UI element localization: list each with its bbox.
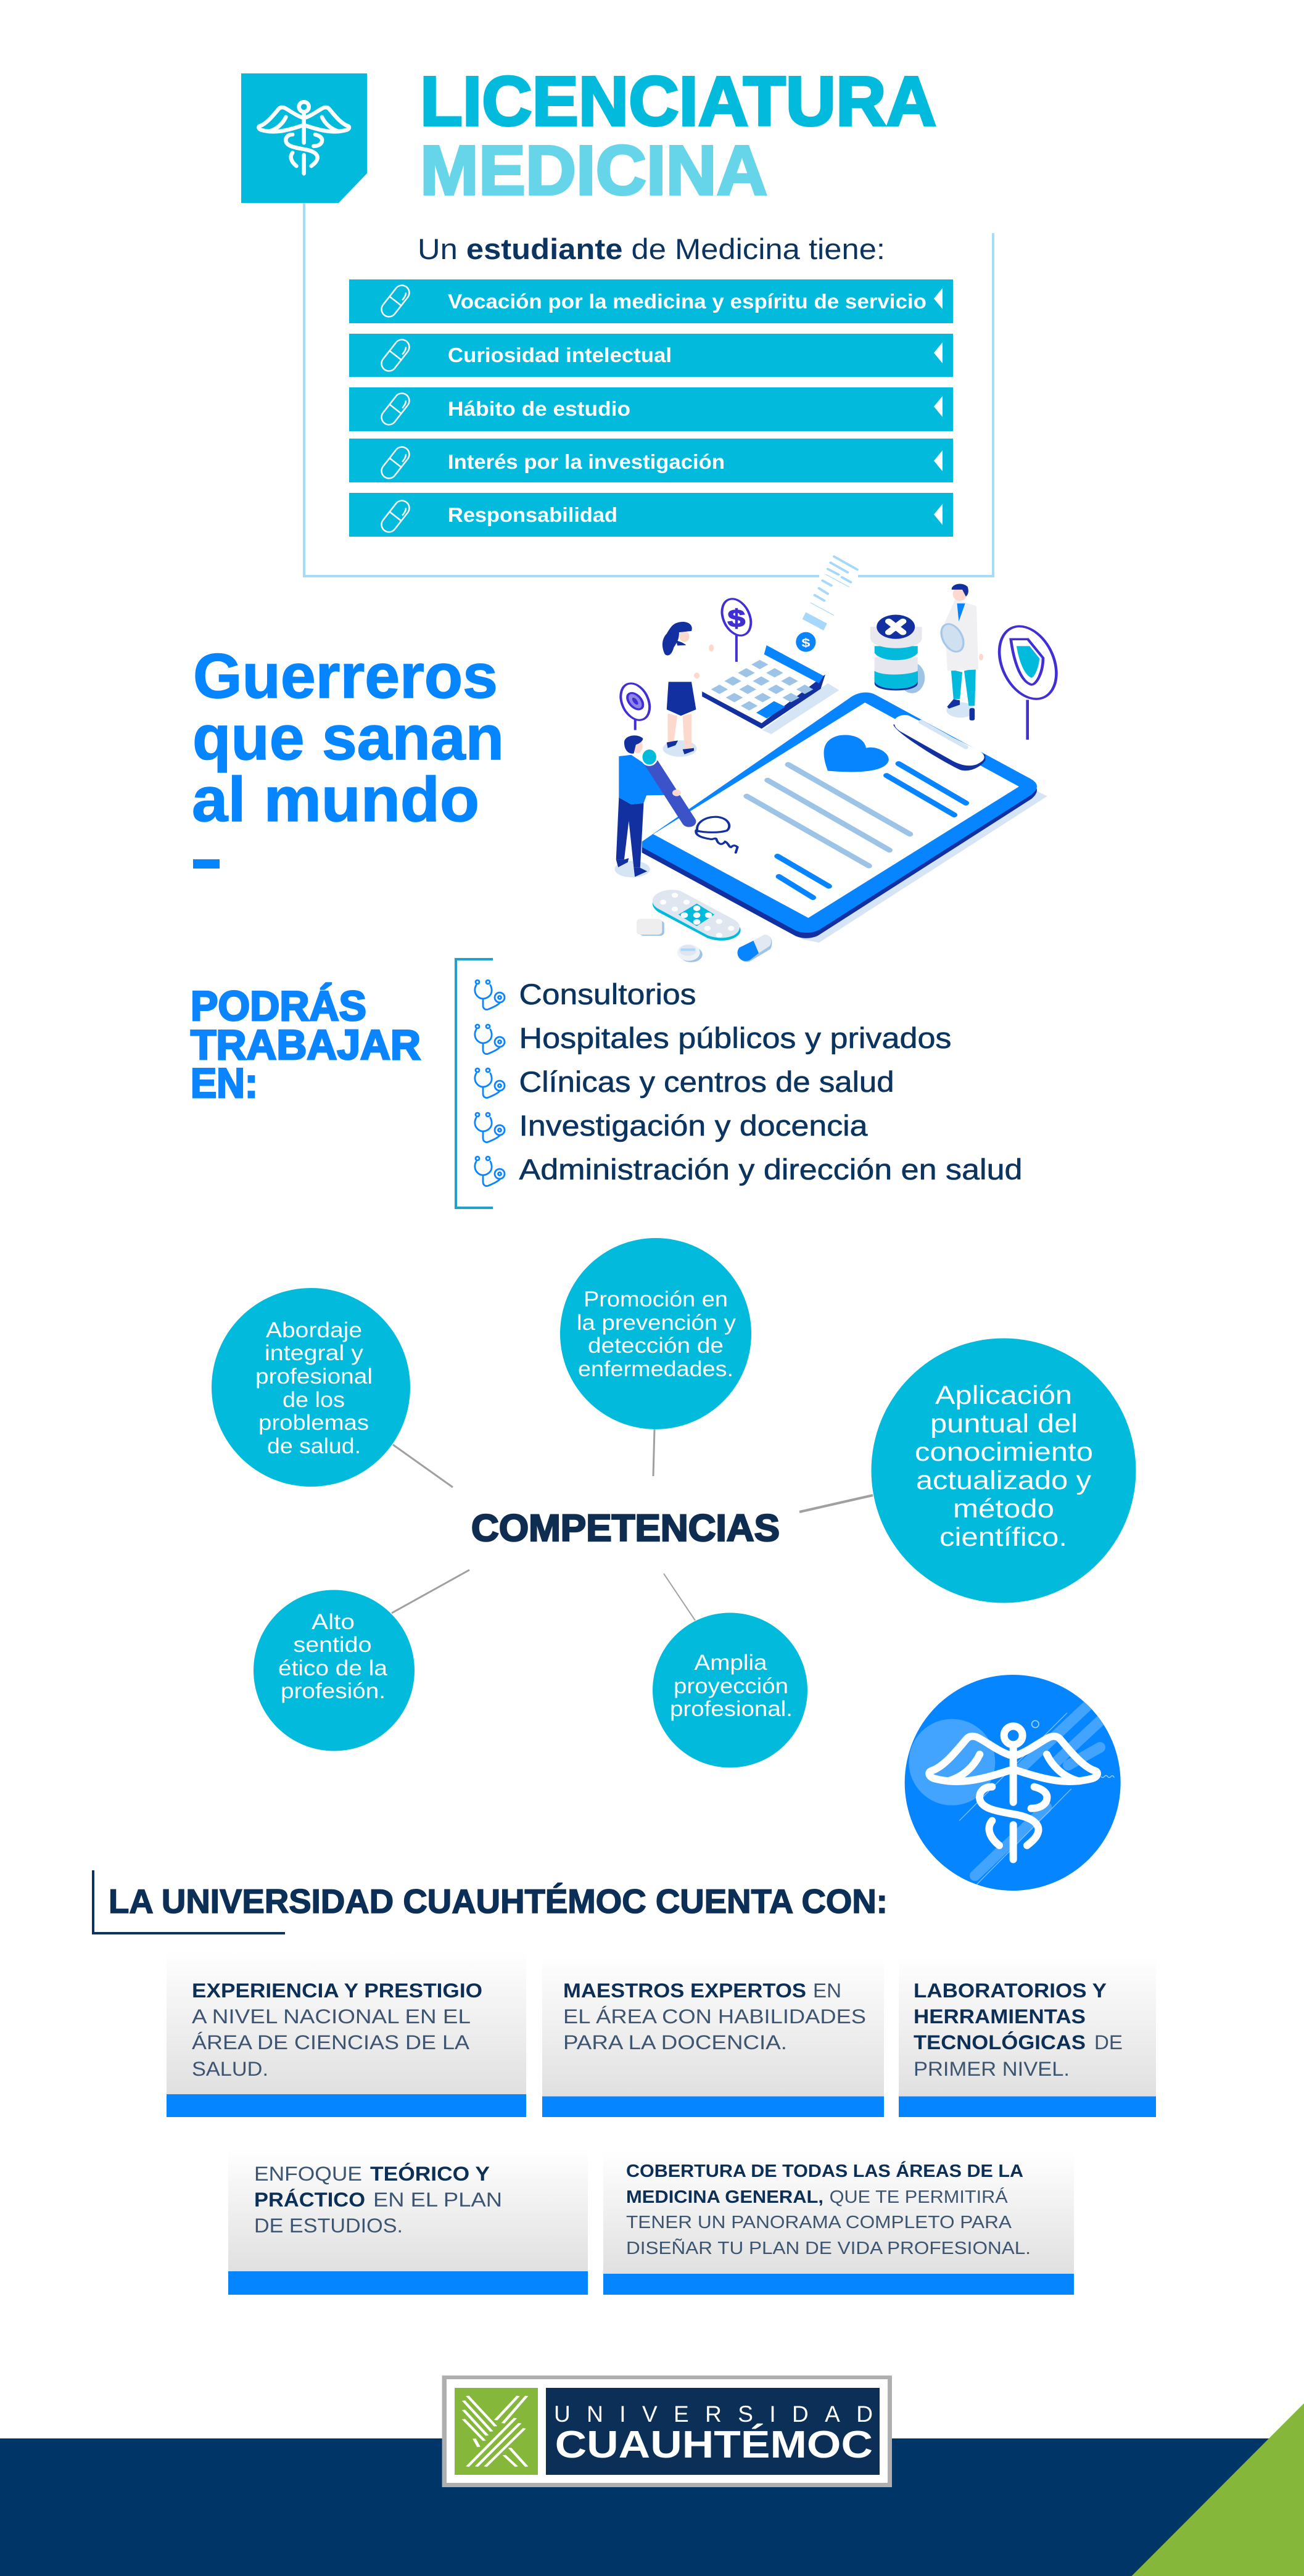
card: enfoque teórico y práctico: TEÓRICO Y	[370, 2163, 490, 2185]
icon: bandage	[653, 890, 741, 941]
list item: clínicas: Clínicas y centros de salud	[519, 1065, 894, 1098]
bubble: promoción: enfermedades.	[578, 1357, 733, 1381]
icon: man with pen	[614, 735, 689, 877]
bubble: amplia	[653, 1612, 807, 1768]
icon: eye marker	[616, 681, 654, 730]
list item: curiosidad	[349, 334, 953, 377]
bubble: abordaje: profesional	[255, 1364, 373, 1389]
icon: medicine bottle	[870, 615, 925, 693]
icon: woman figure	[662, 622, 714, 757]
card: enfoque teórico y práctico: PRÁCTICO	[254, 2189, 365, 2211]
bubble: abordaje	[212, 1288, 410, 1487]
icon: signature	[696, 817, 738, 852]
bubble: alto sentido: Alto	[312, 1610, 355, 1634]
card: cobertura: COBERTURA DE TODAS LAS ÁREAS DE LA	[626, 2160, 1023, 2181]
bubble: promoción: detección de	[588, 1334, 724, 1358]
card: enfoque teórico y práctico: ENFOQUE	[254, 2163, 362, 2185]
list item: vocación: Vocación por la medicina y espíritu de servicio	[448, 290, 926, 313]
logo: universidad cuauhtémoc: UNIVERSIDAD	[554, 2401, 873, 2427]
icon: dollar sign marker: $	[728, 605, 746, 632]
bubble: alto sentido	[254, 1590, 415, 1751]
icon: doctor figure	[938, 584, 983, 720]
bracket: workplaces list	[456, 959, 493, 1208]
bubble: promoción: Promoción en	[584, 1287, 728, 1311]
heading: podrás trabajar en: EN:	[191, 1060, 258, 1107]
logo: universidad cuauhtémoc: CUAUHTÉMOC	[555, 2424, 873, 2466]
card: laboratorios	[899, 1957, 1156, 2117]
bubble: amplia: Amplia	[695, 1651, 767, 1675]
card: laboratorios: LABORATORIOS Y	[914, 1979, 1107, 2002]
icon: small tablet	[637, 919, 664, 936]
card: cobertura: TENER UN PANORAMA COMPLETO PARA	[626, 2213, 1012, 2232]
card: cobertura	[603, 2152, 1074, 2295]
bubble: aplicación: puntual del	[930, 1409, 1078, 1439]
card: maestros expertos: PARA LA DOCENCIA.	[563, 2031, 787, 2054]
list item: responsabilidad	[349, 493, 953, 537]
title	[420, 62, 936, 209]
card: laboratorios: HERRAMIENTAS	[914, 2005, 1086, 2028]
card: laboratorios: TECNOLÓGICAS	[914, 2031, 1086, 2054]
heading: podrás trabajar en: PODRÁS	[191, 983, 366, 1030]
bubble: alto sentido: ético de la	[278, 1656, 388, 1680]
heading: podrás trabajar en: TRABAJAR	[191, 1022, 421, 1068]
card: experiencia y prestigio: EXPERIENCIA Y PRESTIGIO	[192, 1979, 482, 2002]
panel: student traits frame	[304, 203, 993, 576]
card: experiencia y prestigio: A NIVEL NACIONAL EN EL	[192, 2005, 471, 2028]
bubble: abordaje: integral y	[265, 1341, 364, 1365]
bubble: abordaje: de salud.	[267, 1434, 361, 1458]
card: enfoque teórico y práctico	[228, 2149, 588, 2295]
icon: coin	[796, 632, 815, 652]
panel: clipboard	[642, 693, 1047, 943]
bubble: amplia: profesional.	[670, 1697, 793, 1721]
card: enfoque teórico y práctico: DE ESTUDIOS.	[254, 2215, 403, 2237]
list item: interés: Interés por la investigación	[448, 450, 725, 473]
heading: guerreros que sanan al mundo: que sanan	[192, 703, 504, 773]
list item: consultorios: Consultorios	[519, 978, 696, 1010]
icon: header caduceus badge	[241, 73, 367, 203]
icon: dollar sign marker	[717, 597, 756, 662]
icon: logo X mark	[463, 2396, 527, 2467]
card: maestros expertos: EN	[813, 1979, 841, 2002]
icon: capsule	[738, 935, 772, 962]
card: cobertura: QUE TE PERMITIRÁ	[830, 2187, 1008, 2207]
list item: hábito	[349, 387, 953, 431]
heading: podrás trabajar en	[191, 983, 421, 1107]
bubble: abordaje: de los	[283, 1388, 345, 1412]
card: enfoque teórico y práctico: EN EL PLAN	[373, 2189, 502, 2211]
list item: administración: Administración y dirección en salud	[519, 1153, 1023, 1186]
heading: competencias: COMPETENCIAS	[471, 1507, 780, 1549]
card: laboratorios: DE	[1094, 2031, 1123, 2054]
bubble: alto sentido: profesión.	[281, 1679, 386, 1703]
list item: hábito: Hábito de estudio	[448, 397, 630, 420]
bubble: aplicación: científico.	[939, 1522, 1067, 1552]
card: experiencia y prestigio: ÁREA DE CIENCIAS DE LA	[192, 2031, 470, 2054]
logo: universidad cuauhtémoc	[442, 2376, 892, 2487]
icon: coin: $	[801, 636, 811, 650]
bubble: alto sentido: sentido	[294, 1633, 371, 1657]
bubble: aplicación	[871, 1339, 1136, 1603]
heading: la universidad cuauhtémoc cuenta con: LA UNIVERSIDAD CUAUHTÉMOC CUENTA CON:	[109, 1882, 888, 1920]
bubble: aplicación: Aplicación	[935, 1381, 1072, 1410]
icon: paper strip	[803, 556, 857, 630]
card: experiencia y prestigio: SALUD.	[192, 2058, 268, 2080]
bubble: aplicación: actualizado y	[916, 1466, 1092, 1495]
list item: hospitales: Hospitales públicos y privados	[519, 1022, 951, 1054]
footer triangle	[1132, 2403, 1304, 2576]
bubble: amplia: proyección	[674, 1674, 788, 1698]
list item: curiosidad: Curiosidad intelectual	[448, 344, 672, 366]
card: maestros expertos: EL ÁREA CON HABILIDADES	[563, 2005, 866, 2028]
bubble: promoción	[560, 1238, 751, 1429]
icon: caduceus circle	[905, 1675, 1121, 1891]
bubble: abordaje: problemas	[258, 1411, 369, 1435]
list: workplaces	[475, 978, 1023, 1186]
bubble: aplicación: conocimiento	[915, 1437, 1093, 1467]
footer band	[0, 2438, 1304, 2576]
bubble: abordaje: Abordaje	[266, 1318, 362, 1342]
title: LICENCIATURA	[420, 62, 936, 140]
card: cobertura: MEDICINA GENERAL,	[626, 2187, 823, 2207]
card: maestros expertos	[542, 1957, 884, 2117]
heading: guerreros que sanan al mundo	[192, 641, 504, 869]
bubble: aplicación: método	[953, 1494, 1054, 1524]
list item: interés	[349, 439, 953, 482]
heading: guerreros que sanan al mundo: Guerreros	[193, 641, 498, 711]
list item: investigación: Investigación y docencia	[519, 1109, 868, 1142]
card: laboratorios: PRIMER NIVEL.	[914, 2058, 1070, 2080]
card: experiencia y prestigio	[167, 1951, 526, 2117]
card: cobertura: DISEÑAR TU PLAN DE VIDA PROFESIONAL.	[626, 2237, 1031, 2258]
card: maestros expertos: MAESTROS EXPERTOS	[563, 1979, 806, 2002]
icon: round pill	[677, 944, 703, 962]
icon: shield marker	[990, 621, 1066, 740]
section heading bracket	[93, 1870, 285, 1933]
list item: vocación	[349, 279, 953, 323]
list item: responsabilidad: Responsabilidad	[448, 503, 617, 526]
connectors: competencias	[392, 1429, 873, 1620]
heading: student traits: Un estudiante de Medicina tiene:	[418, 233, 885, 265]
icon: calculator	[702, 645, 839, 734]
title: MEDICINA	[420, 131, 767, 209]
bubble: promoción: la prevención y	[577, 1311, 737, 1335]
illustration: isometric medical clipboard	[614, 556, 1066, 962]
heading: guerreros que sanan al mundo: al mundo	[192, 764, 479, 835]
